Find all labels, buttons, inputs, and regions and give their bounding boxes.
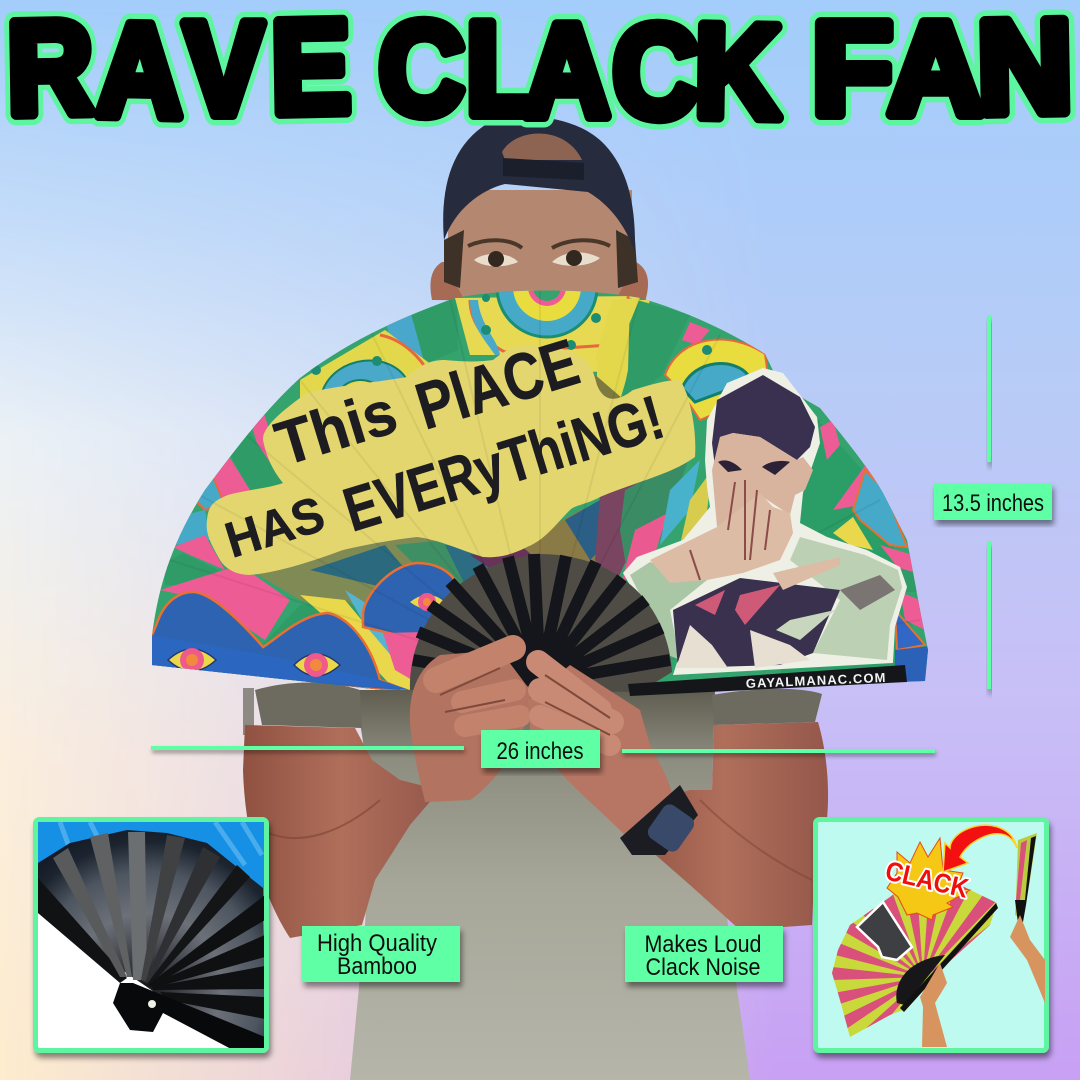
label: High Quality Bamboo: High Quality — [317, 930, 437, 957]
fan: pleat shading — [170, 285, 920, 680]
fan text: This Place Has Everything: HAS — [219, 486, 331, 569]
label: 26 inches: 26 inches — [496, 738, 584, 765]
label: Makes Loud Clack Noise: Clack Noise — [646, 954, 760, 981]
bamboo panel: guard and pivot — [113, 983, 265, 1050]
label: 26 inches — [481, 730, 600, 768]
bamboo panel: blue fabric — [38, 822, 264, 896]
person: arms and torso — [243, 682, 828, 1080]
fan pattern: bottom-left blue clouds — [150, 563, 458, 692]
figure: hands — [650, 493, 793, 583]
fan — [152, 290, 928, 696]
fan pattern: dim rays under the speech blob — [257, 460, 709, 606]
clack panel: hands — [920, 915, 1045, 1047]
fan: cutout figure of man with hand over face — [623, 368, 907, 675]
fan: website on guard stick: GAYALMANAC.COM — [745, 670, 887, 691]
label: Makes Loud Clack Noise — [625, 926, 783, 982]
fan text: This Place Has Everything: PlACE — [407, 324, 587, 443]
person — [243, 117, 828, 1080]
label: High Quality Bamboo — [302, 926, 460, 982]
fan text: This Place Has Everything: This — [268, 378, 405, 479]
fan pattern: top area — [300, 290, 768, 422]
title: RAVE CLACK FAN — [6, 0, 1074, 146]
clack panel: CLACK word: CLACK — [883, 856, 972, 904]
fan: black bamboo ribs — [410, 554, 907, 696]
fan text: This Place Has Everything: EVERyThiNG! — [336, 383, 672, 545]
left hand — [410, 648, 530, 802]
figure: hair — [712, 375, 815, 467]
fan text: This Place Has Everything — [219, 324, 672, 569]
label: High Quality Bamboo: Bamboo — [337, 953, 417, 980]
figure: face — [712, 433, 813, 527]
clack panel: starburst — [887, 838, 970, 920]
hands holding fan — [410, 648, 672, 835]
person: backwards cap — [443, 117, 635, 252]
label: 13.5 inches — [934, 483, 1052, 520]
label: Makes Loud Clack Noise: Makes Loud — [644, 931, 762, 958]
clack panel: trash can megaphone icon — [857, 902, 912, 960]
label: 13.5 inches: 13.5 inches — [942, 490, 1044, 517]
fan pattern: left side — [152, 384, 293, 668]
clack panel: red curved arrow — [943, 825, 1017, 872]
clack panel: striped fan — [832, 886, 998, 1037]
dimension line: width — [151, 746, 935, 753]
clack panel: closed fan — [1015, 833, 1037, 920]
fan pattern: right of figure — [780, 400, 930, 684]
fan pattern: eyes — [168, 593, 445, 677]
panel: clack noise illustration — [803, 820, 1046, 1080]
bamboo panel: dark gaps between ribs — [38, 830, 266, 1047]
wristwatch — [620, 785, 698, 855]
bamboo panel: ribs — [38, 832, 265, 1019]
person: head — [430, 190, 648, 310]
fan fabric and pattern — [152, 290, 928, 692]
dimension line: height — [987, 315, 991, 689]
panel: bamboo close-up — [36, 820, 266, 1050]
right hand — [528, 662, 672, 835]
fan: yellow speech blob — [207, 345, 695, 575]
